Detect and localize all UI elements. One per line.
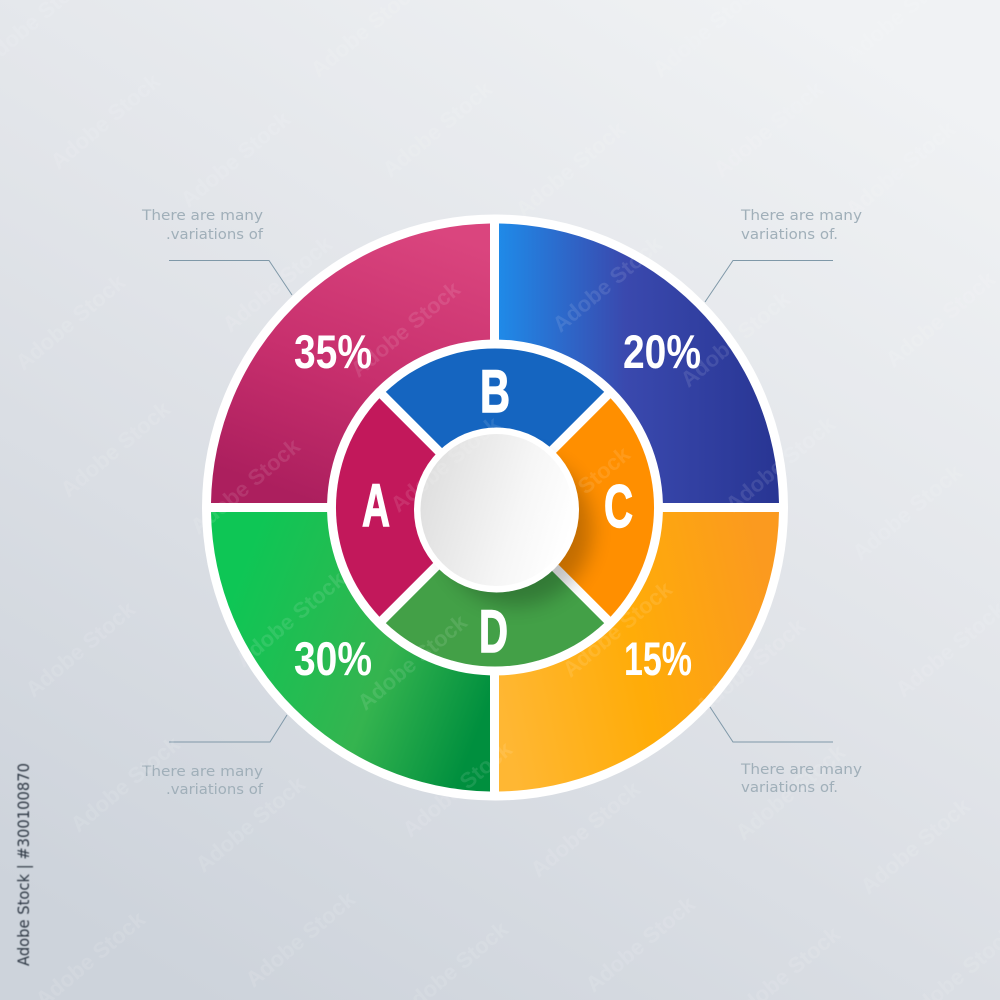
caption bottom left: .variations of: [166, 782, 264, 798]
leader line bottom right: [710, 707, 833, 742]
watermarks: Adobe Stock: [46, 68, 165, 174]
caption bottom right: [740, 762, 862, 796]
outer segment: 30% green: [211, 512, 490, 792]
watermarks: Adobe Stock: [841, 116, 960, 222]
caption top left: There are many: [141, 208, 263, 224]
watermarks: Adobe Stock: [186, 433, 305, 539]
center circle shadow: [440, 454, 592, 606]
watermarks: Adobe Stock: [218, 231, 337, 337]
watermarks: Adobe Stock: [881, 266, 1000, 372]
watermarks: Adobe Stock: [516, 441, 635, 547]
watermarks: Adobe Stock: [241, 886, 360, 992]
percentage 15%: 15%: [624, 632, 692, 685]
watermarks: Adobe Stock: [691, 613, 810, 719]
inner segment B: [386, 348, 604, 501]
watermarks: Adobe Stock: [709, 76, 828, 182]
watermarks: Adobe Stock: [558, 576, 677, 682]
outer segment: 35% magenta: [211, 224, 490, 503]
caption bottom right: There are many: [740, 762, 862, 778]
watermarks: Adobe Stock: [526, 776, 645, 882]
inner segment C: [501, 398, 654, 617]
watermarks: Adobe Stock: [378, 76, 497, 182]
inner segment D: [386, 514, 604, 667]
watermarks: Adobe Stock: [11, 269, 130, 375]
watermarks: Adobe Stock: [581, 891, 700, 997]
leader line top right: [705, 260, 833, 302]
percentage 20%: 20%: [623, 325, 701, 378]
watermarks: Adobe Stock: [21, 596, 140, 702]
letter B: B: [480, 358, 510, 425]
outer segment: 15% orange: [499, 512, 779, 792]
caption top left: [141, 208, 264, 243]
caption top right: [740, 208, 862, 243]
leader line top left: [169, 260, 292, 295]
watermarks: Adobe Stock: [548, 231, 667, 337]
watermarks: Adobe Stock: [848, 459, 967, 565]
letter C: C: [604, 473, 633, 540]
watermarks: Adobe Stock: [346, 276, 465, 382]
watermarks: Adobe Stock: [731, 739, 850, 845]
watermarks: Adobe Stock: [353, 609, 472, 715]
outer segment: 20% blue: [499, 224, 779, 503]
stock id label: Adobe Stock | #300100870: [14, 763, 33, 966]
pie chart outer white disc: [202, 214, 788, 800]
letter A: A: [362, 472, 390, 539]
caption bottom left: [141, 764, 264, 798]
watermarks: Adobe Stock: [676, 286, 795, 392]
caption top right: There are many: [740, 208, 862, 224]
watermarks: Adobe Stock: [231, 566, 350, 672]
caption top right: variations of.: [741, 227, 838, 243]
center white circle: [414, 428, 579, 592]
leader line bottom left: [169, 715, 287, 742]
watermarks: Adobe Stock: [721, 411, 840, 517]
percentage 30%: 30%: [294, 632, 372, 685]
percentage 35%: 35%: [294, 325, 372, 378]
watermarks: Adobe Stock: [66, 731, 185, 837]
caption bottom left: There are many: [141, 764, 263, 780]
watermarks: Adobe Stock: [398, 736, 517, 842]
inner segment A: [336, 398, 489, 617]
watermarks: Adobe Stock: [56, 396, 175, 502]
watermarks: Adobe Stock: [176, 106, 295, 212]
watermarks: Adobe Stock: [386, 411, 505, 517]
watermarks: Adobe Stock: [191, 771, 310, 877]
letter D: D: [479, 598, 508, 665]
watermarks: Adobe Stock: [511, 116, 630, 222]
watermarks: Adobe Stock: [856, 793, 975, 899]
caption bottom right: variations of.: [741, 780, 838, 796]
caption top left: .variations of: [166, 227, 264, 243]
